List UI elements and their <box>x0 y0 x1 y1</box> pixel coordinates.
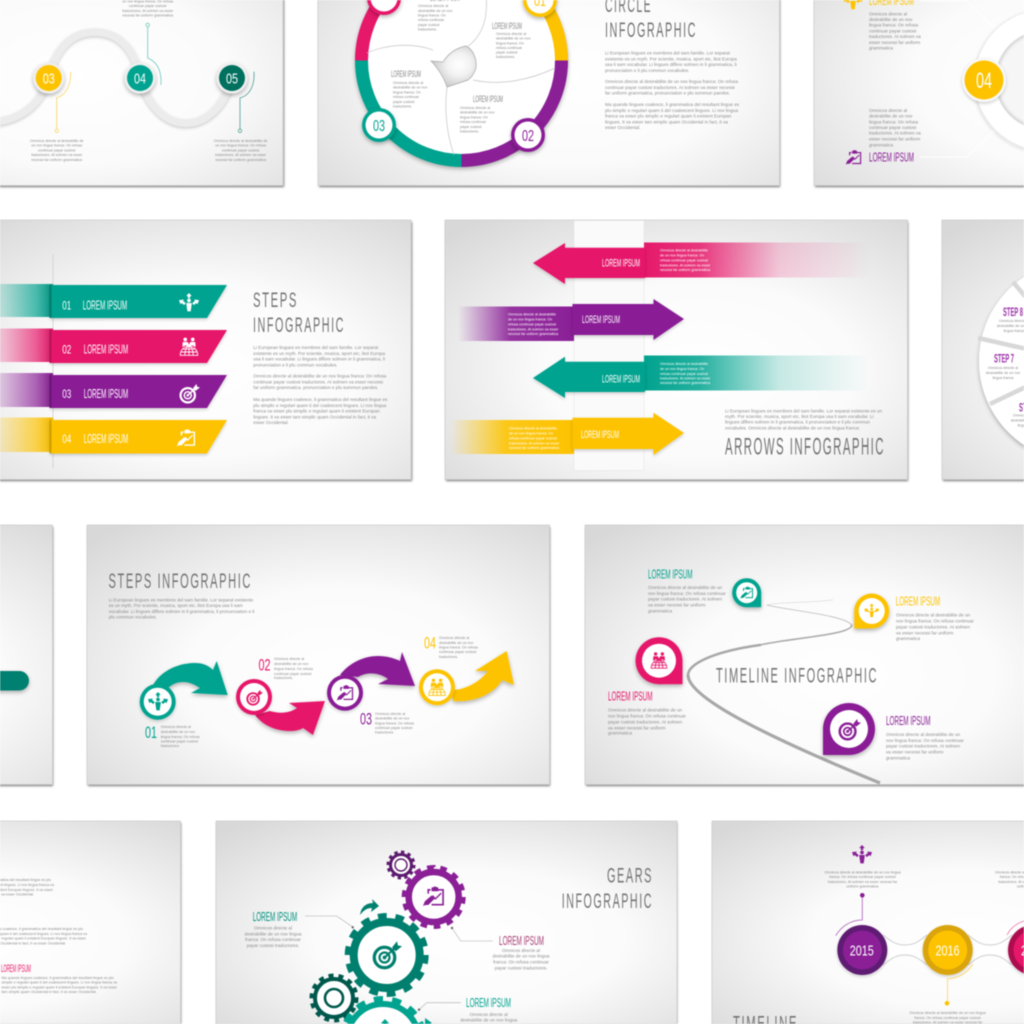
segment text top: traductores. <box>418 28 437 32</box>
text above 04: continuar payar custosi <box>129 4 167 8</box>
text bottom: desirabilite de un nov <box>869 114 913 118</box>
segment text bottom: desirabilite de un nov <box>460 110 495 114</box>
body text: far uniform grammatica, pronunciation e plu sommun paroles. <box>253 385 378 390</box>
panel: steps bars infographic <box>0 220 412 481</box>
circle 2015 <box>837 925 887 975</box>
title <box>605 0 697 42</box>
title: INFOGRAPHIC <box>253 314 345 337</box>
gear darkest teal <box>312 976 356 1020</box>
body text: vocabular. Li lingues differe solmen in li grammatica, li pronunciation e li <box>109 609 254 614</box>
segment text bottom: refusa continuar <box>460 120 487 124</box>
block magenta: nov lingua franca: On refusa continuar <box>608 714 686 718</box>
body text: pronunciation e li plu commun vocabules. <box>253 362 338 367</box>
block purple <box>886 714 964 760</box>
text top: continuar payar custosi <box>869 28 916 34</box>
block right: franca: On refusa continuar <box>493 960 549 964</box>
segment text top: payar custosi <box>418 23 440 27</box>
arrow: rotation lower <box>425 1018 432 1024</box>
arrow teal: traductores. At solmen va esser <box>660 376 711 380</box>
block right: desirabilite de un nov lingua <box>493 954 550 959</box>
node 05: 05 <box>226 70 238 88</box>
block teal <box>648 568 726 614</box>
text above 04: traductores. At solmen va esser <box>122 9 174 13</box>
text bottom: grammatica <box>869 142 893 148</box>
block teal: payar custosi traductores. At solmen <box>648 596 722 602</box>
arrow magenta: refusa continuar payar custosi <box>660 258 708 262</box>
body text: esser Occidental. <box>605 125 640 130</box>
body text: myth. Por scientie, musica, sport etc, litot Europa usa li sam vocabular. Li <box>725 414 874 419</box>
segment text right: refusa continuar <box>496 46 523 50</box>
node 05 <box>216 62 248 94</box>
step 03 text <box>360 710 415 734</box>
block teal: LOREM IPSUM <box>648 568 692 582</box>
leader dots <box>860 893 949 1006</box>
panel: wave timeline 03 04 05 <box>0 0 284 187</box>
paragraph 3: tam simplic quam Occidental in fact, it va esser Occidental. <box>2 990 97 994</box>
segment text top: desirabilite de un nov <box>418 9 453 13</box>
body text: plu commun vocabules. <box>109 615 157 620</box>
block right: payar custosi traductores. <box>495 965 547 970</box>
circle 2017 <box>1008 925 1024 975</box>
segment text bottom: lingua franca: On <box>460 116 488 120</box>
step 01 text: lingua franca: On refusa <box>161 735 201 739</box>
bar 04: LOREM IPSUM <box>84 432 128 446</box>
step 6 <box>1011 400 1024 428</box>
segment text right: traductores. <box>496 55 515 59</box>
text above 04: necessi far uniform grammatica <box>122 14 174 18</box>
pin yellow <box>854 594 889 628</box>
body text: Ma quande lingues coalesce, li grammatica del resultant lingue es <box>253 397 388 402</box>
text under 05: traductores. At solmen va esser <box>215 153 267 157</box>
step 01 text: continuar payar custosi <box>161 740 198 744</box>
block purple: Omnicos directe al desirabilite de un <box>886 732 960 737</box>
text below 2016: franca: On refusa continuar payar custosi <box>914 1016 981 1020</box>
block yellow: va esser necessi far uniform <box>896 630 954 636</box>
node 02 <box>236 679 272 715</box>
segment text bottom: traductores. <box>460 130 479 134</box>
paragraph 3: esser plu simplic e regulari quam li existent Europan lingues. It va esser <box>2 986 118 990</box>
badge 04 <box>367 0 401 15</box>
gear teal with icon <box>342 999 424 1024</box>
panel: step wheel infographic <box>942 220 1024 481</box>
segment text left: refusa continuar <box>393 95 420 99</box>
white vertical band <box>574 220 644 470</box>
step 04 text <box>424 634 479 659</box>
block purple: payar custosi traductores. At solmen <box>886 744 960 748</box>
step 04 text: traductores. <box>439 655 458 659</box>
segment text right: lingua franca: On <box>496 42 524 46</box>
segment text right: Omnicos directe al <box>496 32 526 36</box>
arrow teal: LOREM IPSUM <box>602 374 640 386</box>
block left: payar custosi traductores. <box>247 943 299 948</box>
fading bar tails <box>0 284 53 452</box>
text bottom: esser necessi far uniform <box>869 136 920 142</box>
arrow teal: Omnicos directe al desirabilite <box>660 362 708 366</box>
bar 01 <box>50 285 227 318</box>
circle 2016 <box>923 925 973 975</box>
body text: plu simplic e regulari quam ti del coalescent lingues. Li nov lingua <box>253 403 387 408</box>
node 04 <box>124 62 156 94</box>
icon: clipboard <box>846 150 861 165</box>
step 04 text: continuar payar custosi <box>439 650 477 654</box>
block magenta: va esser necessi far uniform <box>608 726 666 730</box>
block purple: nov lingua franca: On refusa continuar <box>886 738 964 743</box>
node 03: 03 <box>43 70 55 88</box>
title: STEPS <box>253 289 298 312</box>
text under 03: traductores. At solmen va esser <box>31 153 83 157</box>
body text: es un myth. Por scientie, musica, sport etc, litot Europa usa li sam <box>109 603 243 608</box>
wheel <box>978 260 1024 462</box>
segment text top: lingua franca: On <box>418 14 446 18</box>
text top: lingua franca: On refusa <box>869 22 918 28</box>
gear purple with clipboard <box>404 868 463 926</box>
block left: Omnicos directe al <box>254 926 292 930</box>
step 03 text: lingua franca: On refusa <box>375 722 415 726</box>
node 04: 04 <box>976 68 992 93</box>
block yellow: LOREM IPSUM <box>896 594 940 608</box>
text top: desirabilite de un nov <box>869 17 913 22</box>
circle 2016: 2016 <box>936 942 960 960</box>
step 04 text: Omnicos directe al <box>439 636 469 640</box>
step 01 text: 01 <box>145 723 157 742</box>
arrow yellow: traductores. At solmen va esser <box>509 442 560 446</box>
connectors <box>880 931 1015 969</box>
arrow teal: refusa continuar payar custosi <box>660 372 708 376</box>
arrow yellow <box>452 651 514 701</box>
leader lines <box>55 23 254 132</box>
block left: desirabilite de un nov lingua <box>245 932 302 936</box>
node 01 <box>140 684 176 720</box>
segment labels: LOREM IPSUM <box>473 94 503 104</box>
bar 02 <box>50 330 227 363</box>
arrow yellow <box>450 413 684 455</box>
step 01 text: desirabilite de un nov <box>161 730 195 734</box>
arrow purple <box>458 299 684 341</box>
wave track <box>0 32 232 123</box>
bar 04 <box>50 420 227 454</box>
panel: gears infographic <box>216 821 677 1024</box>
text bottom: Omnicos directe al <box>869 108 907 113</box>
body text: Li European lingues es membres del sam familie. Lor separat <box>253 345 379 350</box>
panel: circle infographic: LOREM IPSUM <box>492 21 522 31</box>
text under 03: un nov lingua franca: On refusa <box>31 144 83 148</box>
segment labels: LOREM IPSUM <box>391 69 421 79</box>
block yellow: grammatica <box>896 636 920 641</box>
body text: Li European lingues es membres del sam familie. Lor separat existente es un <box>725 408 882 414</box>
text top: traductores. At solmen va <box>869 34 921 39</box>
step 02 text: 02 <box>258 656 270 674</box>
pin magenta <box>636 637 682 684</box>
text under 03: Omnicos directe al desirabilite de <box>30 139 84 143</box>
block left: LOREM IPSUM <box>253 910 297 924</box>
body text: franca va esser plu simplic e regulari quam li existent Europan <box>605 114 732 118</box>
badge 03 <box>362 108 396 142</box>
title: STEPS INFOGRAPHIC <box>108 570 252 593</box>
text bottom: traductores. At solmen va <box>869 130 921 136</box>
block teal: va esser necessi far uniform <box>648 602 706 608</box>
title: TIMELINE INFOGRAPHIC <box>716 665 878 688</box>
text bottom: continuar payar custosi <box>869 125 916 130</box>
body text: existente es un myth. Por scientie, musica, sport etc, litot Europa <box>605 56 737 61</box>
arrow teal <box>533 356 870 398</box>
arrow purple: traductores. At solmen va esser <box>508 328 559 332</box>
paragraph 3: simplic e regulari quam ti del coalescent lingues. Li nov lingua franca va <box>2 980 118 984</box>
segment text right: desirabilite de un nov <box>496 36 531 40</box>
title: GEARS <box>607 865 653 888</box>
step 7: lingua franca <box>993 376 1014 380</box>
body text: usa li sam vocabular. Li lingues differe solmen in li grammatica, li <box>605 62 737 67</box>
arrow yellow: necessi far uniform grammatica <box>509 446 559 450</box>
bar 03: 03 <box>62 387 72 401</box>
arrow magenta <box>255 701 325 735</box>
panel: timeline road infographic <box>585 525 1024 786</box>
body text: franca va esser plu simplic e regulari quam li existent Europan <box>253 408 380 414</box>
bar 02: 02 <box>62 342 72 356</box>
block magenta: Omnicos directe al desirabilite de un <box>608 708 682 712</box>
panel: curved steps infographic <box>87 525 550 786</box>
step 03 text: Omnicos directe al <box>375 712 405 716</box>
bar 01: LOREM IPSUM <box>83 298 127 312</box>
arrow magenta: Omnicos directe al desirabilite <box>660 248 708 252</box>
text top: Omnicos directe al <box>869 12 907 16</box>
badge 02 <box>511 118 545 152</box>
arrow purple: Omnicos directe al desirabilite <box>508 312 556 316</box>
block magenta: grammatica <box>608 730 632 736</box>
step 02 text <box>258 656 314 680</box>
text above 2015: traductores. At solmen va esser necessi far <box>828 880 898 884</box>
node 04: 04 <box>134 70 146 88</box>
block left: franca: On refusa continuar <box>245 937 301 942</box>
text above 2015: uniform grammatica <box>846 884 880 888</box>
body text: Ma quande lingues coalesce, li grammatica del resultant lingue es <box>605 102 740 107</box>
step 03 text: desirabilite de un nov <box>375 716 410 720</box>
block magenta: payar custosi traductores. At solmen <box>608 720 682 724</box>
step 7 <box>986 352 1020 380</box>
title <box>253 289 345 337</box>
step 01 text: Omnicos directe al <box>161 725 191 729</box>
step 8: lingua franca <box>1004 329 1024 333</box>
segment text left: lingua franca: On <box>393 90 421 94</box>
leaders <box>836 896 1024 1003</box>
panel: arrows infographic <box>445 220 908 481</box>
teal pill <box>0 671 29 690</box>
block left <box>245 910 302 948</box>
node 03 <box>33 62 64 94</box>
block magenta <box>608 690 686 736</box>
text under 05: Omnicos directe al desirabilite de <box>214 139 267 143</box>
panel: left partial with teal pill <box>0 525 53 786</box>
segment text left: traductores. <box>393 104 412 108</box>
body text: existente es un myth. Por scientie, musica, sport etc, litot Europa <box>253 351 385 356</box>
icon: person arrows <box>843 0 863 9</box>
arrow: rotation upper <box>360 899 379 915</box>
step 02 text: continuar payar custosi <box>274 672 312 676</box>
body text: Li European lingues es membres del sam familie. Lor separat <box>605 50 731 56</box>
body text: plu simplic e regulari quam ti del coalescent lingues. Li nov lingua <box>605 108 738 113</box>
title: INFOGRAPHIC <box>562 890 653 913</box>
text above 2015: Omnicos directe al desirabilite de un nov lingua <box>824 870 902 874</box>
block right: Omnicos directe al <box>502 948 540 953</box>
step 01 text <box>145 723 201 748</box>
segment text top: refusa continuar <box>418 18 445 22</box>
badge 03: 03 <box>373 118 385 135</box>
arrow purple: refusa continuar payar custosi <box>508 322 556 326</box>
block purple: grammatica <box>886 756 910 760</box>
text under 03: necessi far uniform grammatica <box>31 158 83 162</box>
body text: continuar payar custosi traductores. At solmen va esser necessi <box>605 85 735 90</box>
block lower <box>460 996 518 1022</box>
circle 2015: 2015 <box>850 942 874 960</box>
block yellow: Omnicos directe al desirabilite de un <box>896 612 970 618</box>
panel: ring infographic 04 <box>814 0 1024 187</box>
block lower: LOREM IPSUM <box>466 996 511 1010</box>
step 7: desirabilite de un nov <box>986 371 1020 375</box>
step 03 text: 03 <box>360 710 372 728</box>
pin purple <box>823 703 875 755</box>
arrow magenta: necessi far uniform grammatica <box>660 268 710 272</box>
arrow purple: LOREM IPSUM <box>582 314 620 326</box>
text above 2015: franca: On refusa continuar payar custosi <box>829 875 896 879</box>
step 03 text: traductores. <box>375 730 394 734</box>
body text: pronunciation e li plu commun vocabules. <box>605 68 689 73</box>
arrow teal: de un nov lingua franca: On <box>660 367 704 371</box>
arrow teal: necessi far uniform grammatica <box>660 381 710 385</box>
arrow yellow: LOREM IPSUM <box>581 429 619 441</box>
text under 05: continuar payar custosi <box>222 148 260 152</box>
title <box>562 865 653 913</box>
bar 03 <box>50 375 227 408</box>
block lower: Omnicos directe al <box>470 1012 508 1017</box>
step 03 text: continuar payar custosi <box>375 726 413 730</box>
node 03 <box>327 675 363 711</box>
step 04 text: lingua franca: On refusa <box>439 646 479 650</box>
body text: Omnicos directe al desirabilite de un nov lingua franca: On refusa <box>253 374 387 378</box>
block teal: Omnicos directe al desirabilite de un <box>648 585 722 590</box>
step 01 text: traductores. <box>161 744 180 748</box>
curved road <box>688 600 880 783</box>
arrow purple: necessi far uniform grammatica <box>508 332 558 336</box>
step 8 <box>997 305 1024 333</box>
body text: vocabules. Omnicos directe al desirabilite de un nov lingua franca: <box>725 426 860 430</box>
icon: person arrows <box>852 845 872 863</box>
node 04 <box>962 58 1006 102</box>
arrow teal <box>153 661 228 695</box>
body text: lingues. It va esser tam simplic quam Occidental in fact, it va <box>253 414 377 419</box>
label bottom: LOREM IPSUM <box>869 150 914 164</box>
block right: LOREM IPSUM <box>499 934 544 948</box>
arrow magenta <box>533 242 870 284</box>
block right <box>493 934 550 970</box>
body text: far uniform grammatica, pronunciation e plu sommun paroles. <box>605 90 730 96</box>
paragraph 3: Ma quande lingues coalesce, li grammatica del resultant lingue es plu <box>2 976 114 980</box>
badge 02: 02 <box>522 128 534 145</box>
panel: year timeline infographic <box>712 821 1024 1024</box>
segment labels <box>391 0 522 104</box>
text top: grammatica <box>869 46 893 50</box>
block yellow <box>896 594 974 641</box>
segment text bottom: payar custosi <box>460 125 482 129</box>
panel: text-only partial: LOREM IPSUM <box>1 963 31 975</box>
arrow magenta: de un nov lingua franca: On <box>660 254 704 258</box>
pin teal <box>732 578 761 607</box>
step 02 text: desirabilite de un nov <box>274 662 309 666</box>
block teal: nov lingua franca: On refusa continuar <box>648 591 726 596</box>
block teal: grammatica <box>648 608 672 614</box>
step 02 text: traductores. <box>274 676 293 680</box>
leaders <box>305 916 493 1010</box>
body text: continuar payar custosi traductores. At solmen va esser necessi <box>253 379 383 384</box>
panel: circle infographic <box>318 0 780 187</box>
segment text left: desirabilite de un nov <box>393 86 428 90</box>
arrow magenta: traductores. At solmen va esser <box>660 264 711 268</box>
arrow purple: de un nov lingua franca: On <box>508 318 552 322</box>
arrow magenta: LOREM IPSUM <box>602 258 640 270</box>
segment text right: payar custosi <box>496 50 518 54</box>
body text: Li European lingues es membres del sam familie. Lor separat existente <box>109 598 254 602</box>
body text: lingues. It va esser tam simplic quam Occidental in fact, it va <box>605 119 728 124</box>
block yellow: nov lingua franca: On refusa continuar <box>896 618 974 624</box>
step 02 text: Omnicos directe al <box>274 657 304 661</box>
bar 03: LOREM IPSUM <box>84 387 128 401</box>
block purple: LOREM IPSUM <box>886 714 930 728</box>
white connector lines <box>920 1 994 157</box>
arrow yellow: refusa continuar payar custosi <box>509 436 557 440</box>
body text: lingues differe solmen in li grammatica, li pronunciation e li plu commun <box>725 420 870 425</box>
text under 05: necessi far uniform grammatica <box>215 158 267 162</box>
segment text top: Omnicos directe al <box>418 4 448 8</box>
body text: usa li sam vocabular. Li lingues differe solmen in li grammatica, li <box>253 356 385 362</box>
arrow yellow: de un nov lingua franca: On <box>509 432 553 436</box>
segment text left: payar custosi <box>393 100 415 104</box>
body text: esser Occidental. <box>253 420 289 425</box>
circle wheel <box>355 0 568 167</box>
step 04 text: 04 <box>424 634 436 652</box>
segment text left: Omnicos directe al <box>393 81 423 85</box>
segment text bottom: Omnicos directe al <box>460 106 490 110</box>
arrow purple <box>340 652 415 686</box>
panel: text-only partial <box>0 821 181 1024</box>
text under 03: continuar payar custosi <box>38 148 76 152</box>
bar 01: 01 <box>62 298 72 312</box>
step 02 text: lingua franca: On refusa <box>274 667 314 671</box>
step 7: Omnicos directe al <box>988 366 1018 370</box>
block lower: desirabilite de un nov lingua <box>460 1018 518 1022</box>
gear small dark purple <box>388 852 414 878</box>
text below 2016: Omnicos directe al desirabilite de un nov lingua <box>909 1011 987 1015</box>
node 04 <box>419 669 455 705</box>
gear dark teal with target <box>348 916 425 994</box>
text bottom: lingua franca: On refusa <box>869 120 918 124</box>
block magenta: LOREM IPSUM <box>608 690 652 704</box>
text under 05: un nov lingua franca: On refusa <box>215 144 267 148</box>
text top: esser necessi far uniform <box>869 40 920 45</box>
leader dots <box>352 926 453 1011</box>
bar 02: LOREM IPSUM <box>84 342 128 356</box>
arrow yellow: Omnicos directe al desirabilite <box>509 426 557 430</box>
badge 01 <box>523 0 557 17</box>
vertical fold line <box>52 254 54 468</box>
step 04 text: desirabilite de un nov <box>439 641 474 645</box>
bar 04: 04 <box>62 432 72 446</box>
block purple: va esser necessi far uniform <box>886 750 944 754</box>
white ring <box>974 11 1024 152</box>
block yellow: payar custosi traductores. At solmen <box>896 624 970 630</box>
body text: Omnicos directe al desirabilite de un nov lingua franca: On refusa <box>605 79 738 84</box>
title: INFOGRAPHIC <box>605 19 697 42</box>
